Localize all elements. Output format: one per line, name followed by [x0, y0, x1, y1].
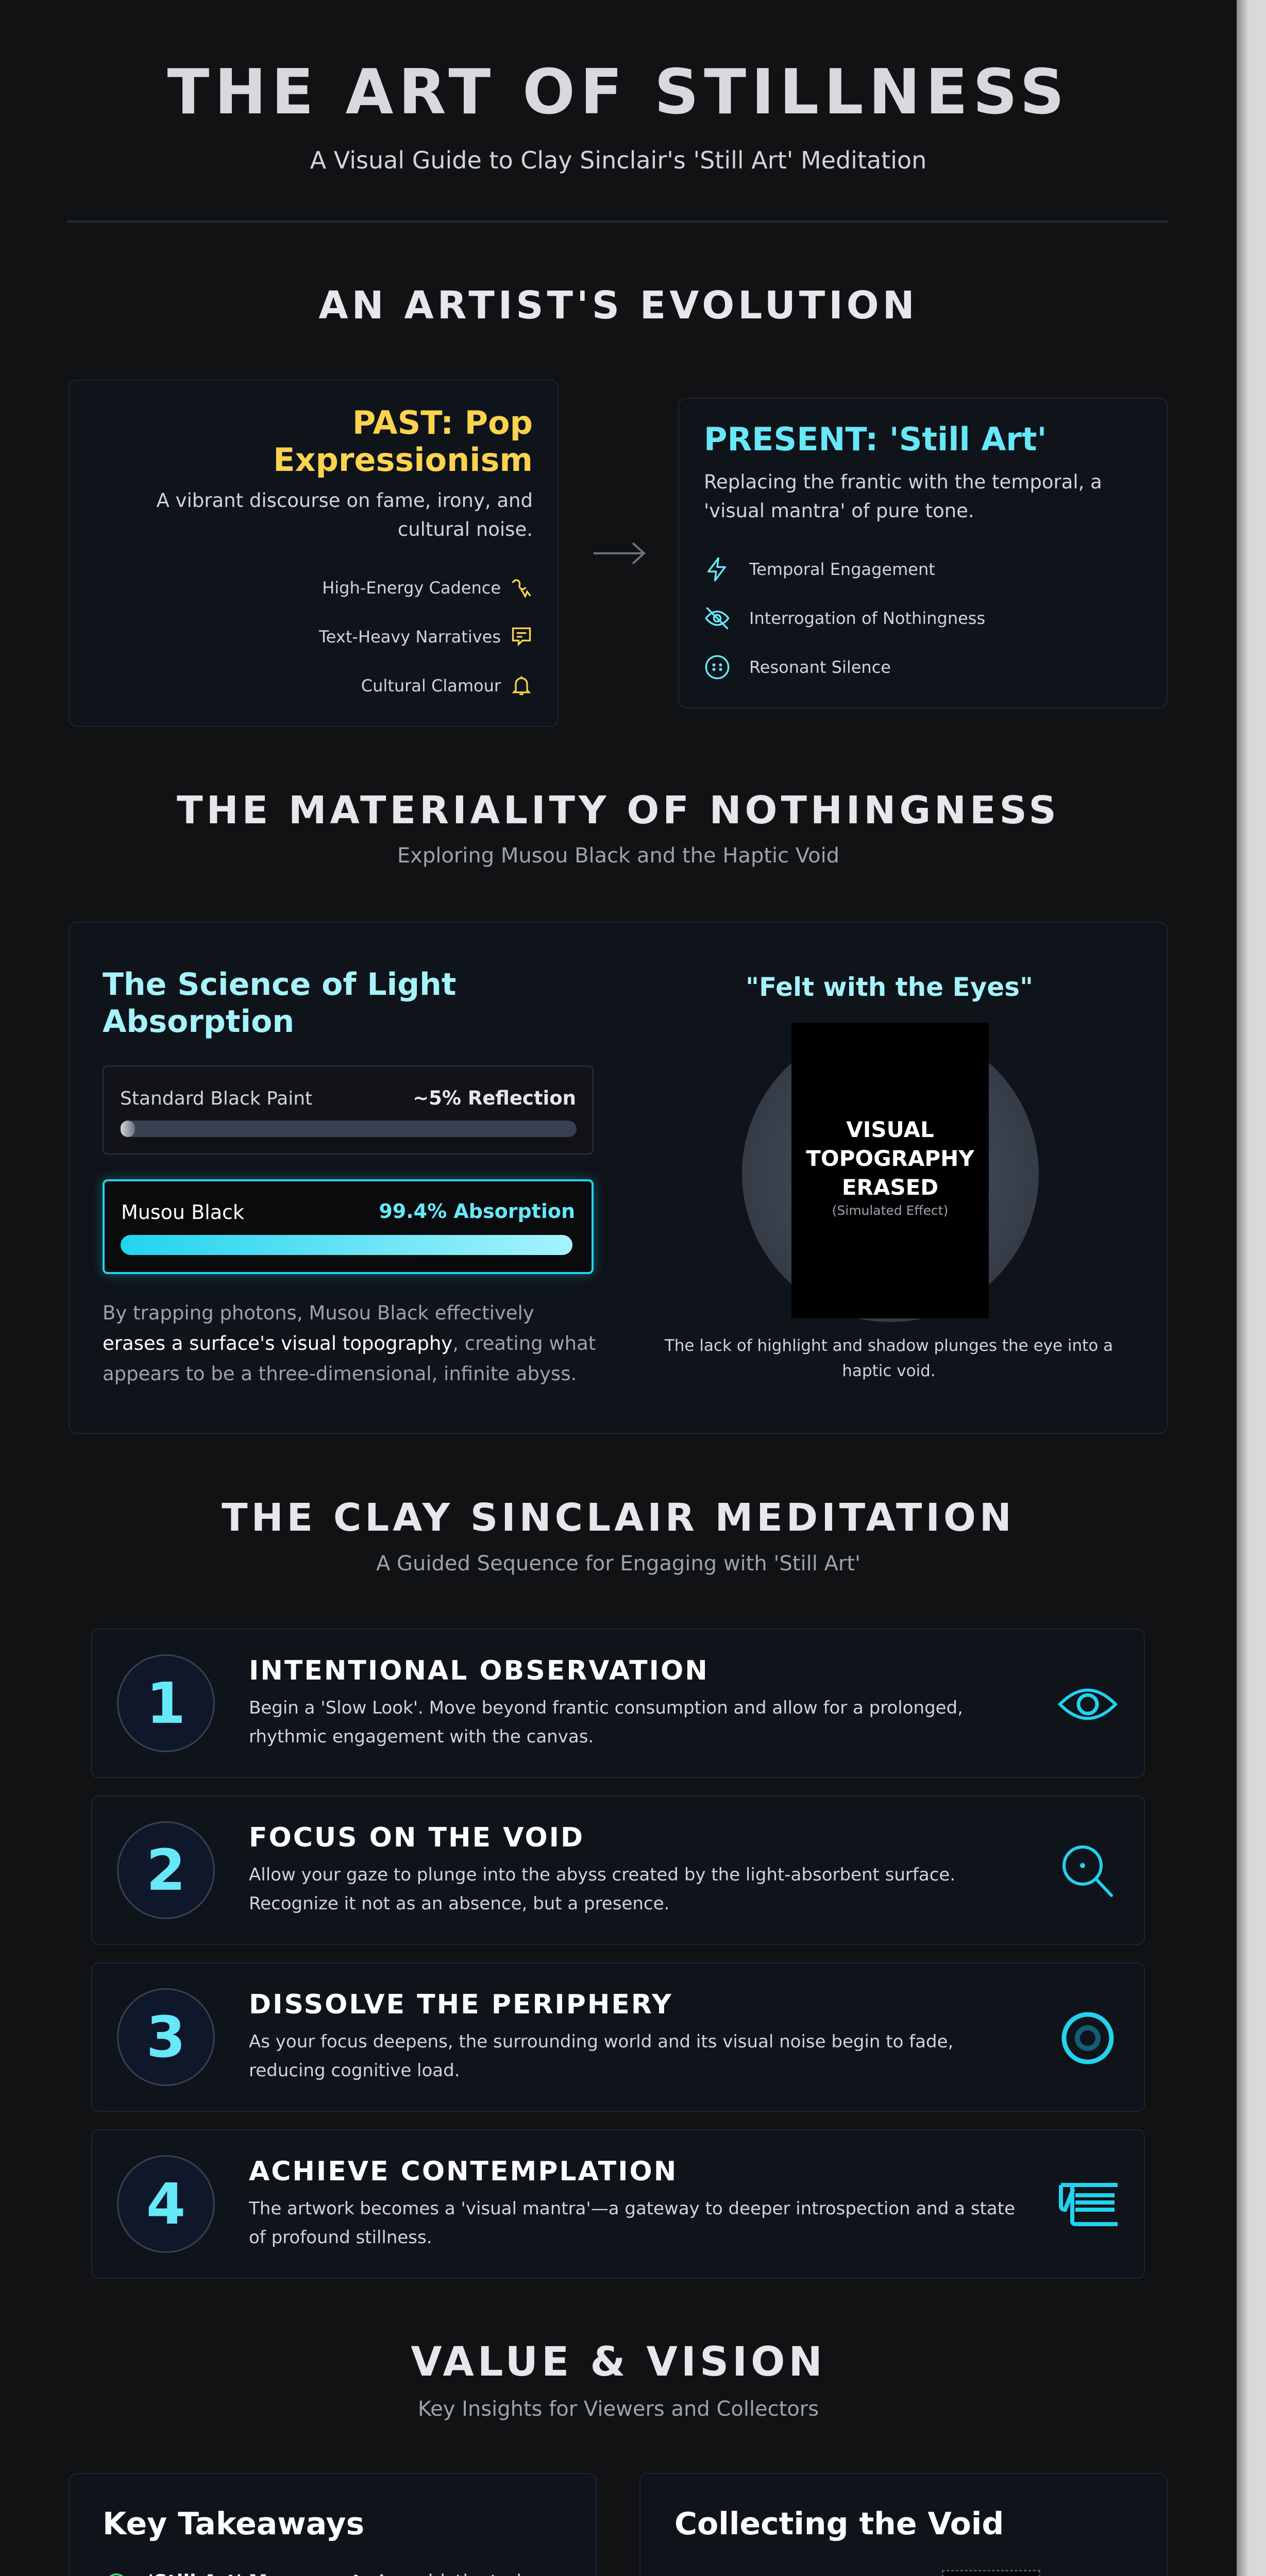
step 3: As your focus deepens, the surrounding world and its visual noise begin to fade, reducing cognitive load.	[249, 2031, 953, 2081]
panel: key takeaways	[69, 2473, 597, 2576]
step 4: 4	[146, 2171, 185, 2237]
science heading: The Science of Light Absorption	[103, 967, 456, 1040]
panel: light absorption: VISUAL	[846, 1117, 934, 1142]
title: THE ART OF STILLNESS	[167, 57, 1070, 128]
absorption paragraph: By trapping photons, Musou Black effectively erases a surface's visual topography, creating what appears to be a three-dimensional, infinite abyss.	[103, 1302, 596, 1385]
past description: A vibrant discourse on fame, irony, and cultural noise.	[157, 489, 533, 540]
step 4: The artwork becomes a 'visual mantra'—a gateway to deeper introspection and a state of profound stillness.	[249, 2198, 1015, 2248]
icon: magnifier	[1062, 1845, 1113, 1897]
arrow	[594, 542, 646, 565]
step 4: ACHIEVE CONTEMPLATION	[249, 2156, 678, 2187]
heading: materiality: THE MATERIALITY OF NOTHINGNESS	[177, 788, 1060, 833]
step 1: INTENTIONAL OBSERVATION	[249, 1655, 709, 1686]
past item: high-energy: High-Energy Cadence	[322, 578, 501, 598]
past item: cultural clamour: Cultural Clamour	[361, 676, 501, 696]
step 3	[91, 1962, 1145, 2112]
heading: meditation: THE CLAY SINCLAIR MEDITATION	[222, 1496, 1015, 1540]
present item: interrogation: Interrogation of Nothingness	[749, 608, 985, 628]
step 2	[91, 1795, 1145, 1945]
step 2: 2	[146, 1837, 185, 1903]
subtitle: materiality: Exploring Musou Black and the Haptic Void	[397, 844, 839, 868]
panel: light absorption: (Simulated Effect)	[832, 1203, 948, 1218]
icon: eye	[1057, 1689, 1118, 1720]
step 2: Allow your gaze to plunge into the abyss created by the light-absorbent surface. Recognize it not as an absence, but a presence.	[249, 1865, 955, 1914]
step 3: 3	[146, 2004, 185, 2070]
panel: light absorption	[69, 922, 1168, 1434]
step 3: DISSOLVE THE PERIPHERY	[249, 1989, 673, 2020]
step 1: Begin a 'Slow Look'. Move beyond frantic consumption and allow for a prolonged, rhythmic engagement with the canvas.	[249, 1698, 963, 1747]
past title: PAST: Pop Expressionism	[273, 404, 533, 479]
step 1	[91, 1629, 1145, 1778]
present item: temporal: Temporal Engagement	[749, 560, 935, 579]
panel: light absorption: ERASED	[842, 1175, 938, 1200]
void visual	[742, 1025, 1039, 1322]
void caption: The lack of highlight and shadow plunges the eye into a haptic void.	[665, 1336, 1113, 1380]
icon: target	[1061, 2012, 1114, 2064]
present description: Replacing the frantic with the temporal, a 'visual mantra' of pure tone.	[704, 471, 1102, 522]
step 4	[91, 2129, 1145, 2279]
collecting heading: Collecting the Void	[674, 2506, 1004, 2542]
present item: temporal	[707, 557, 935, 581]
felt heading: "Felt with the Eyes"	[746, 972, 1033, 1002]
subtitle: A Visual Guide to Clay Sinclair's 'Still Art' Meditation	[310, 146, 926, 174]
standard paint bar: ~5% Reflection	[413, 1087, 576, 1109]
panel: collecting the void	[639, 2473, 1168, 2576]
subtitle: meditation: A Guided Sequence for Engaging with 'Still Art'	[376, 1552, 860, 1575]
heading: an artist's evolution: AN ARTIST'S EVOLUTION	[318, 283, 918, 328]
panel: light absorption: TOPOGRAPHY	[806, 1146, 974, 1171]
subtitle: value: Key Insights for Viewers and Collectors	[418, 2397, 819, 2421]
present title: PRESENT: 'Still Art'	[704, 420, 1047, 458]
panel: past	[69, 380, 559, 727]
past item: text-heavy: Text-Heavy Narratives	[319, 627, 501, 647]
present item: silence	[705, 655, 891, 679]
step 1: 1	[146, 1670, 185, 1736]
panel: present	[678, 398, 1168, 708]
musou black bar: 99.4% Absorption	[379, 1200, 575, 1223]
takeaways heading: Key Takeaways	[103, 2506, 364, 2542]
standard paint bar: Standard Black Paint	[120, 1088, 312, 1109]
heading: value & vision: VALUE & VISION	[411, 2339, 826, 2385]
icon: pages	[1059, 2183, 1118, 2226]
standard paint bar	[103, 1065, 594, 1155]
musou black bar: Musou Black	[121, 1201, 244, 1224]
musou black bar	[103, 1179, 594, 1274]
step 2: FOCUS ON THE VOID	[249, 1822, 584, 1853]
present item: silence: Resonant Silence	[749, 657, 891, 677]
